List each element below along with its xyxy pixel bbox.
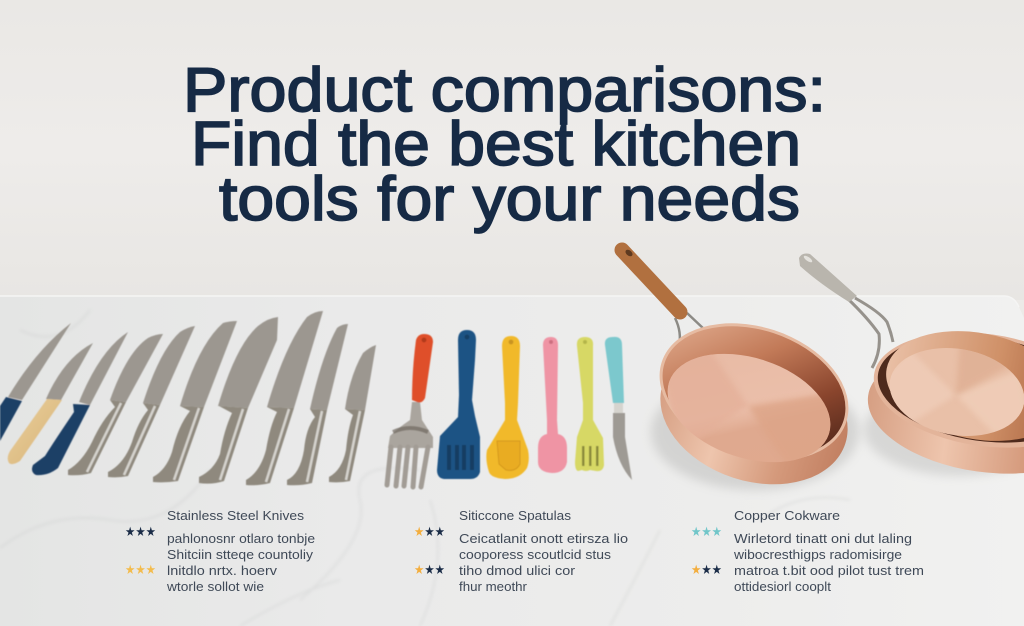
- stainless steel knives group: [0, 311, 376, 485]
- blue slotted spatula: [437, 330, 480, 479]
- outer pan body: [860, 336, 1024, 488]
- knife 5: steel handle: [108, 326, 195, 477]
- caption heading: Copper Cokware: [734, 508, 840, 523]
- caption body text: ottidesiorl cooplt: [734, 579, 831, 594]
- caption body text: [459, 531, 628, 594]
- caption body text: wibocresthigps radomisirge: [733, 547, 902, 562]
- rating stars: teal: ★★★: [691, 525, 722, 540]
- knife 10: steel handle: [329, 345, 376, 482]
- wire handle bracket: [675, 313, 705, 347]
- caption body text: matroa t.bit ood pilot tust trem: [734, 563, 924, 578]
- caption: copper cookware: [691, 508, 924, 594]
- caption body text: fhur meothr: [459, 579, 528, 594]
- knife 2: wooden handle: [8, 343, 93, 464]
- fork: orange handle, steel head: [387, 334, 433, 487]
- title: Find the best kitchen: [191, 110, 801, 179]
- knife 4: steel handle: [68, 334, 163, 475]
- caption body text: [166, 531, 315, 594]
- copper pan with wooden handle: [622, 248, 866, 507]
- outer pan dark interior: [871, 323, 1024, 455]
- caption body text: wtorle sollot wie: [166, 579, 264, 594]
- caption body text: lnitdlo nrtx. hoerv: [167, 563, 278, 578]
- copper pan with steel handle: [799, 254, 1024, 488]
- pan rim: [642, 300, 866, 484]
- rating stars: gold: ★★★: [125, 563, 156, 578]
- caption body text: Wirletord tinatt oni dut laling: [734, 531, 912, 546]
- title: tools for your needs: [219, 165, 800, 234]
- marble countertop: [0, 296, 1024, 626]
- caption: stainless steel knives: [125, 508, 315, 594]
- knife 7: steel handle: [199, 317, 278, 484]
- caption: silicone spatulas: [414, 508, 628, 594]
- pan body: [642, 321, 866, 507]
- inner pan floor: [883, 338, 1024, 446]
- wall background: [0, 0, 1024, 300]
- caption body text: [733, 531, 924, 594]
- title: Product comparisons:: [183, 56, 826, 125]
- knife 8: steel handle: [246, 311, 323, 485]
- knife 3: navy handle: [32, 332, 128, 475]
- steel wire handle: [847, 298, 893, 368]
- title: [183, 56, 826, 234]
- pink spoon spatula: [538, 337, 567, 473]
- teal handled paring knife: [605, 337, 632, 480]
- pan inner wall: [645, 304, 863, 480]
- silicone spatulas group: [387, 330, 632, 487]
- caption body text: pahlonosnr otlaro tonbje: [167, 531, 315, 546]
- caption body text: Ceicatlanit onott etirsza lio: [459, 531, 628, 546]
- rating stars: gold and navy, second row: ★★★: [414, 563, 445, 578]
- inner pan wall: [877, 316, 1024, 456]
- yellow spoon spatula: [486, 336, 529, 479]
- caption body text: Shitciin stteqe countoliy: [167, 547, 314, 562]
- knife 1: navy handle: [0, 323, 71, 441]
- caption heading: Stainless Steel Knives: [167, 508, 305, 523]
- rating stars: navy: ★★★: [125, 525, 156, 540]
- caption heading: Siticcone Spatulas: [459, 508, 572, 523]
- pan floor: [654, 334, 844, 482]
- wooden handle: [622, 250, 680, 312]
- rating stars: gold and navy: ★★★: [414, 525, 445, 540]
- rating stars: gold and navy: ★★★: [691, 563, 722, 578]
- caption body text: cooporess scoutlcid stus: [459, 547, 612, 562]
- caption body text: tiho dmod ulici cor: [459, 563, 576, 578]
- knife 6: steel handle: [153, 321, 237, 482]
- outer pan rim: [866, 319, 1024, 461]
- steel grip: [799, 254, 857, 302]
- lime fork spatula: [575, 337, 604, 471]
- knife 9: steel handle: [287, 324, 348, 485]
